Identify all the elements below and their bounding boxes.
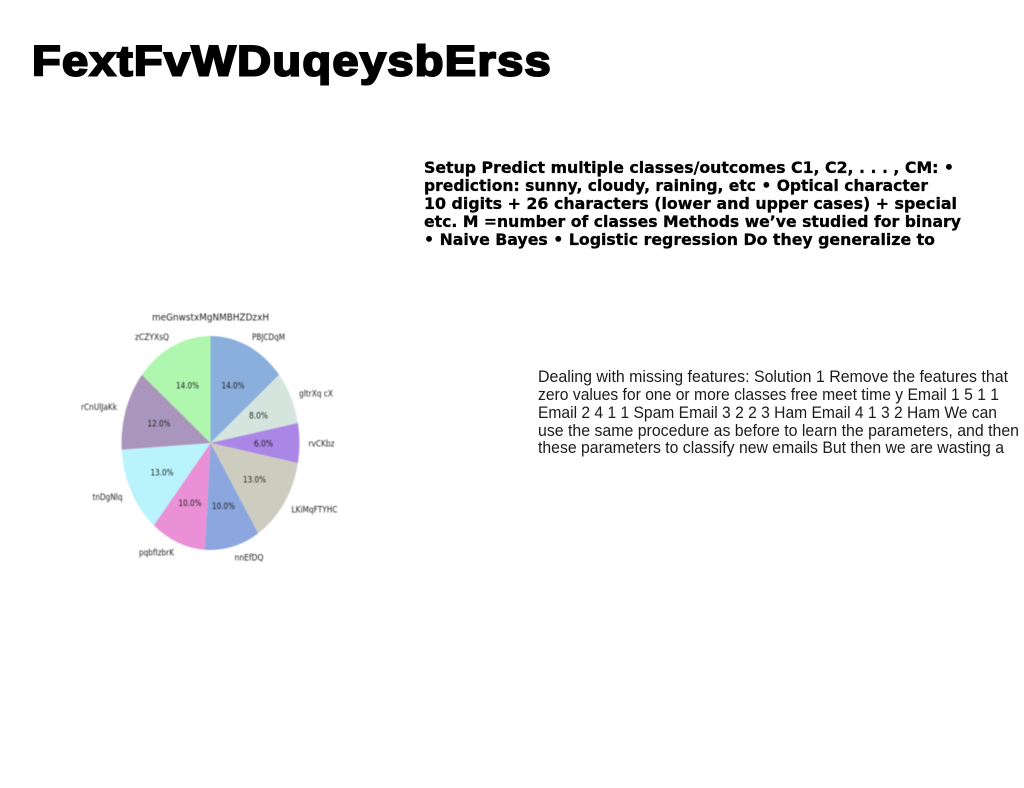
slice labels: pqbfIzbrK xyxy=(139,548,174,558)
slice: gltrXq cX 8% xyxy=(210,375,298,443)
percentage labels: 6.0% xyxy=(254,440,273,450)
text block: multi-class setup: 10 digits + 26 characters (lower and upper cases) + special xyxy=(424,194,957,213)
slice: rCnUlJaKk 12% xyxy=(122,375,210,450)
slice: nnEfDQ 10% xyxy=(205,443,258,550)
text block: missing features xyxy=(538,368,1019,457)
slice labels: gltrXq cX xyxy=(299,390,333,400)
text block: missing features: zero values for one or more classes free meet time y Email 1 5 1 1 xyxy=(538,386,999,404)
slice labels xyxy=(81,333,338,564)
slice labels: rvCKbz xyxy=(308,440,335,450)
slice labels: tnDgNlq xyxy=(92,493,122,503)
slice labels: LKiMqFTYHC xyxy=(292,506,338,516)
percentage labels: 13.0% xyxy=(243,476,266,486)
title: FextFvWDuqeysbErss xyxy=(32,38,552,86)
pie chart xyxy=(81,312,338,564)
text block: missing features: use the same procedure as before to learn the parameters, and then xyxy=(538,422,1019,440)
slice: LKiMqFTYHC 13% xyxy=(210,443,298,533)
slice labels: nnEfDQ xyxy=(234,554,264,564)
text block: multi-class setup: prediction: sunny, cloudy, raining, etc • Optical character xyxy=(424,176,928,195)
text block: missing features: these parameters to classify new emails But then we are wasting a xyxy=(538,439,1005,457)
percentage labels xyxy=(148,382,273,512)
slice labels: zCZYXsQ xyxy=(135,333,169,343)
slice: PBJCDqM 14% xyxy=(210,336,279,443)
slice: pqbfIzbrK 10% xyxy=(154,443,210,550)
slice: tnDgNlq 13% xyxy=(122,443,210,525)
percentage labels: 8.0% xyxy=(249,412,268,422)
text block: multi-class setup: • Naive Bayes • Logistic regression Do they generalize to xyxy=(424,230,935,249)
percentage labels: 10.0% xyxy=(212,502,235,512)
text block: missing features: Email 2 4 1 1 Spam Email 3 2 2 3 Ham Email 4 1 3 2 Ham We can xyxy=(538,404,997,422)
text block: multi-class setup xyxy=(424,158,962,249)
percentage labels: 12.0% xyxy=(148,420,170,430)
slice labels: rCnUlJaKk xyxy=(81,403,118,413)
text block: multi-class setup: etc. M =number of classes Methods we’ve studied for binary xyxy=(424,212,962,231)
text block: multi-class setup: Setup Predict multiple classes/outcomes C1, C2, . . . , CM: • xyxy=(424,158,954,177)
percentage labels: 13.0% xyxy=(150,468,174,478)
percentage labels: 14.0% xyxy=(176,382,199,392)
text block: missing features: Dealing with missing features: Solution 1 Remove the features that xyxy=(538,368,1008,386)
slice: rvCKbz 6% xyxy=(210,423,299,463)
percentage labels: 10.0% xyxy=(178,499,202,509)
pie chart title: meGnwstxMgNMBHZDzxH xyxy=(152,312,269,324)
slice labels: PBJCDqM xyxy=(252,333,285,343)
percentage labels: 14.0% xyxy=(222,382,244,392)
slice: zCZYXsQ 14% xyxy=(142,336,210,443)
